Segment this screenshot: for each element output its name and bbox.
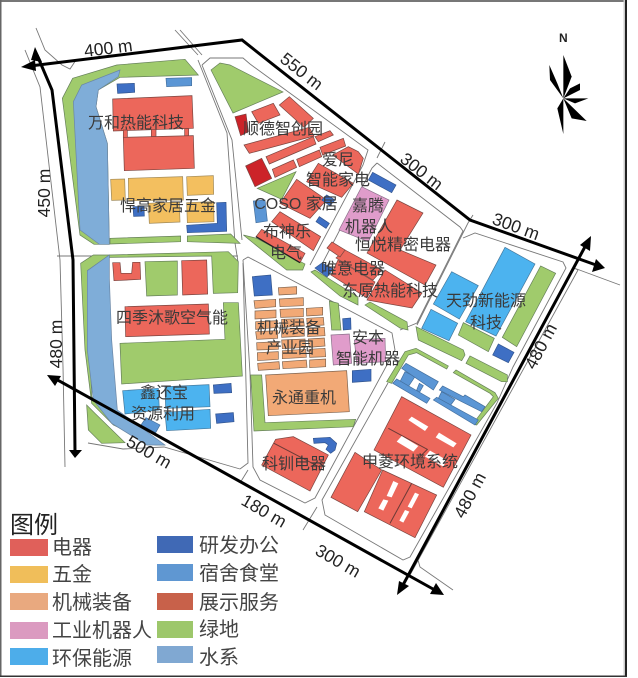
plant labels: 顺德智创园 bbox=[243, 120, 323, 138]
hardware building bbox=[128, 177, 183, 201]
office bbox=[315, 263, 333, 277]
distance labels: 400 m bbox=[83, 35, 134, 61]
water bbox=[87, 255, 165, 445]
panel: northern park wedge bbox=[211, 63, 283, 113]
courtyard bbox=[436, 433, 457, 447]
bar bbox=[244, 127, 314, 153]
courtyard bbox=[397, 436, 418, 452]
plant labels: 资源利用 bbox=[131, 405, 195, 423]
courtyard bbox=[408, 493, 419, 508]
legend item 水系 bbox=[157, 646, 239, 669]
big red bbox=[331, 452, 382, 512]
distance labels: 500 m bbox=[123, 431, 175, 473]
plant labels: 天劲新能源 bbox=[446, 292, 526, 310]
showroom bbox=[246, 158, 272, 187]
arrowhead west bbox=[21, 60, 36, 71]
distance labels: 480 m bbox=[520, 320, 561, 372]
green belt bbox=[109, 252, 238, 293]
new energy bbox=[422, 309, 458, 341]
office bbox=[213, 383, 232, 393]
Bushenle edge line bbox=[256, 237, 300, 263]
dorm connector bbox=[417, 383, 423, 393]
Shenling top bbox=[374, 397, 471, 487]
Weiyi lower bbox=[331, 260, 375, 298]
green edge north-west bbox=[387, 348, 448, 383]
green square bbox=[145, 261, 177, 296]
green belt bbox=[62, 59, 198, 244]
building bbox=[279, 97, 313, 127]
plant labels: 鑫还宝 bbox=[140, 383, 188, 402]
arrowhead lower-right bbox=[430, 583, 444, 595]
road network lines bbox=[25, 28, 620, 590]
distance labels bbox=[34, 35, 561, 582]
green edge north-east bbox=[453, 370, 498, 425]
courtyard bbox=[399, 510, 409, 523]
green strip east bbox=[187, 234, 240, 243]
Weiyi bbox=[336, 250, 382, 280]
distance labels: 180 m bbox=[238, 490, 290, 532]
legend item 工业机器人: 工业机器人 bbox=[52, 619, 152, 642]
bar bbox=[320, 138, 346, 155]
plant labels bbox=[88, 114, 526, 473]
office bbox=[493, 344, 514, 363]
legend title: 图例 bbox=[10, 512, 58, 539]
panel: west-central plot bbox=[81, 252, 242, 445]
green edge bbox=[243, 235, 305, 270]
plant labels: 悍高家居五金 bbox=[120, 197, 216, 215]
distance labels: 450 m bbox=[34, 169, 54, 217]
factory link bbox=[151, 129, 156, 137]
legend item 展示服务: 展示服务 bbox=[199, 591, 279, 614]
machinery units bbox=[254, 287, 326, 370]
plant labels: 爱尼 bbox=[322, 151, 354, 169]
panel: north-west plot buildings bbox=[62, 59, 240, 244]
boundary arrows bbox=[21, 40, 605, 595]
legend item 研发办公: 研发办公 bbox=[199, 534, 279, 557]
distance labels: 480 m bbox=[46, 320, 66, 368]
factory south bbox=[123, 136, 194, 171]
arrowhead north-west bbox=[31, 47, 42, 62]
green strip bbox=[311, 270, 358, 305]
plant labels: 永通重机 bbox=[272, 389, 336, 407]
dormitory bbox=[166, 78, 192, 87]
plant labels: 科技 bbox=[470, 314, 502, 332]
legend item 展示服务 bbox=[157, 591, 279, 614]
plant labels: 科钏电器 bbox=[262, 455, 326, 473]
COSO bbox=[280, 179, 327, 218]
distance labels: 550 m bbox=[276, 48, 327, 94]
office bbox=[216, 413, 234, 423]
factory link bbox=[185, 129, 189, 136]
green strip bbox=[466, 356, 507, 382]
office bbox=[117, 83, 135, 93]
courtyard bbox=[387, 481, 398, 497]
plant labels: 四季沐歌空气能 bbox=[116, 309, 228, 327]
arrowhead upper-right bbox=[580, 236, 591, 251]
green L bbox=[251, 375, 356, 431]
legend item 环保能源: 环保能源 bbox=[52, 647, 132, 670]
plant labels: 智能机器 bbox=[336, 350, 400, 368]
new energy bbox=[433, 272, 478, 319]
Bushenle bbox=[272, 212, 321, 251]
plant labels: 东原热能科技 bbox=[342, 282, 438, 300]
plant labels: 安本 bbox=[352, 329, 384, 347]
Aini building bbox=[333, 147, 363, 174]
smart home bbox=[307, 163, 353, 197]
factory links bbox=[123, 130, 127, 137]
Four seasons bbox=[125, 304, 209, 337]
plant labels: 万和热能科技 bbox=[88, 114, 184, 132]
panel: Shunde and central-north plots bbox=[235, 97, 396, 270]
water channel bbox=[73, 70, 120, 244]
courtyard bbox=[408, 417, 428, 431]
Dongyuan bbox=[367, 270, 422, 308]
legend item 工业机器人 bbox=[10, 619, 152, 642]
legend item 机械装备: 机械装备 bbox=[52, 591, 132, 614]
Bushenle lower bbox=[256, 229, 305, 263]
compass star bbox=[549, 55, 588, 134]
north letter: N bbox=[559, 31, 568, 45]
bar bbox=[272, 160, 297, 177]
divider bbox=[390, 483, 412, 523]
robot building bbox=[354, 338, 386, 363]
office small bbox=[133, 206, 144, 216]
plant labels: 嘉腾 bbox=[352, 197, 384, 215]
office bbox=[316, 217, 329, 228]
dorm bar bbox=[439, 386, 485, 412]
office bbox=[368, 172, 396, 193]
plant labels: 恒悦精密电器 bbox=[355, 236, 451, 254]
new energy main bbox=[466, 247, 535, 336]
courtyard bbox=[425, 451, 447, 467]
legend item 宿舍食堂: 宿舍食堂 bbox=[199, 562, 279, 585]
dorm bar bbox=[402, 363, 438, 390]
building bbox=[252, 103, 280, 123]
green strip bbox=[329, 301, 341, 330]
north compass bbox=[549, 31, 588, 134]
plant labels: 智能家电 bbox=[306, 171, 370, 189]
legend item 五金: 五金 bbox=[52, 563, 92, 586]
legend bbox=[10, 512, 279, 670]
plant labels: 电气 bbox=[270, 244, 302, 262]
bar bbox=[266, 137, 316, 164]
U building bbox=[113, 262, 141, 281]
Hengyue bbox=[367, 200, 436, 285]
Kechuan bbox=[262, 437, 328, 491]
green triangle bbox=[87, 405, 125, 443]
legend item 宿舍食堂 bbox=[157, 562, 279, 585]
dorm connector bbox=[438, 392, 455, 406]
hardware building bbox=[148, 202, 180, 223]
big green bbox=[120, 303, 242, 384]
office bbox=[322, 195, 335, 206]
office bbox=[252, 275, 272, 296]
robot building bbox=[331, 334, 352, 365]
bar bbox=[297, 150, 322, 167]
office bbox=[343, 318, 351, 330]
panel: dormitories and green edge of south-east plot bbox=[387, 348, 498, 425]
factory north bbox=[113, 96, 193, 131]
robot building bbox=[339, 187, 389, 242]
legend item 研发办公 bbox=[157, 534, 279, 557]
bar small bbox=[315, 131, 333, 142]
panel: eastern central factories bbox=[311, 200, 436, 330]
green bbox=[502, 266, 556, 347]
plant labels: 产业园 bbox=[266, 339, 314, 357]
green strip bbox=[365, 302, 408, 330]
plant labels: 机械装备 bbox=[257, 319, 321, 337]
small building bbox=[327, 242, 345, 257]
legend item 电器 bbox=[10, 536, 92, 559]
hardware building bbox=[187, 202, 214, 223]
office L shape bbox=[187, 202, 227, 233]
distance labels: 300 m bbox=[396, 148, 447, 194]
Kechuan ridge bbox=[274, 443, 320, 467]
hardware buildings bbox=[111, 179, 125, 200]
dorm connector bbox=[400, 372, 415, 387]
distance labels: 300 m bbox=[490, 209, 542, 244]
Shenling lower bbox=[364, 470, 437, 538]
legend item 五金 bbox=[10, 563, 92, 586]
Yongtong heavy machinery bbox=[266, 371, 349, 416]
green strip bbox=[416, 327, 465, 361]
green strip bbox=[110, 236, 181, 244]
arrowhead lower-left bbox=[47, 375, 61, 386]
arrowhead lower bbox=[397, 581, 409, 595]
new energy bbox=[165, 385, 210, 408]
office hook bbox=[313, 437, 337, 453]
distance labels: 300 m bbox=[312, 540, 364, 582]
legend item 绿地 bbox=[157, 618, 239, 641]
legend item 机械装备 bbox=[10, 591, 132, 614]
legend item 电器: 电器 bbox=[52, 536, 92, 559]
legend item 环保能源 bbox=[10, 647, 132, 670]
legend item 水系: 水系 bbox=[199, 646, 239, 669]
west green bbox=[81, 255, 165, 445]
hardware building bbox=[187, 176, 214, 195]
red building bbox=[182, 260, 208, 295]
courtyard bbox=[378, 499, 388, 511]
green triangle bbox=[257, 172, 296, 199]
Xinhuanbao bbox=[123, 388, 159, 414]
office bbox=[352, 369, 371, 382]
dorm bar bbox=[393, 379, 430, 403]
plant labels: 布神乐 bbox=[263, 223, 311, 241]
arrowhead south bbox=[69, 450, 82, 458]
dorm bar bbox=[433, 397, 478, 425]
green bbox=[458, 323, 494, 352]
showroom bbox=[235, 114, 248, 136]
legend item 绿地: 绿地 bbox=[199, 618, 239, 641]
green wedge bbox=[211, 63, 283, 113]
distance labels: 480 m bbox=[449, 469, 490, 521]
plant labels: 唯意电器 bbox=[321, 259, 385, 278]
dormitory bbox=[253, 200, 267, 223]
plant labels: 申菱环境系统 bbox=[362, 452, 458, 471]
panel: machinery park bbox=[251, 275, 386, 431]
new energy bbox=[165, 409, 211, 431]
plant labels: COSO 家居 bbox=[254, 195, 338, 213]
Shenling divider bbox=[388, 428, 427, 460]
dorm bbox=[141, 418, 160, 433]
panel: south plots bbox=[262, 397, 471, 538]
panel: east new-energy plot bbox=[416, 247, 556, 382]
plant labels: 机器人 bbox=[345, 218, 393, 236]
arrowhead east bbox=[592, 259, 605, 272]
